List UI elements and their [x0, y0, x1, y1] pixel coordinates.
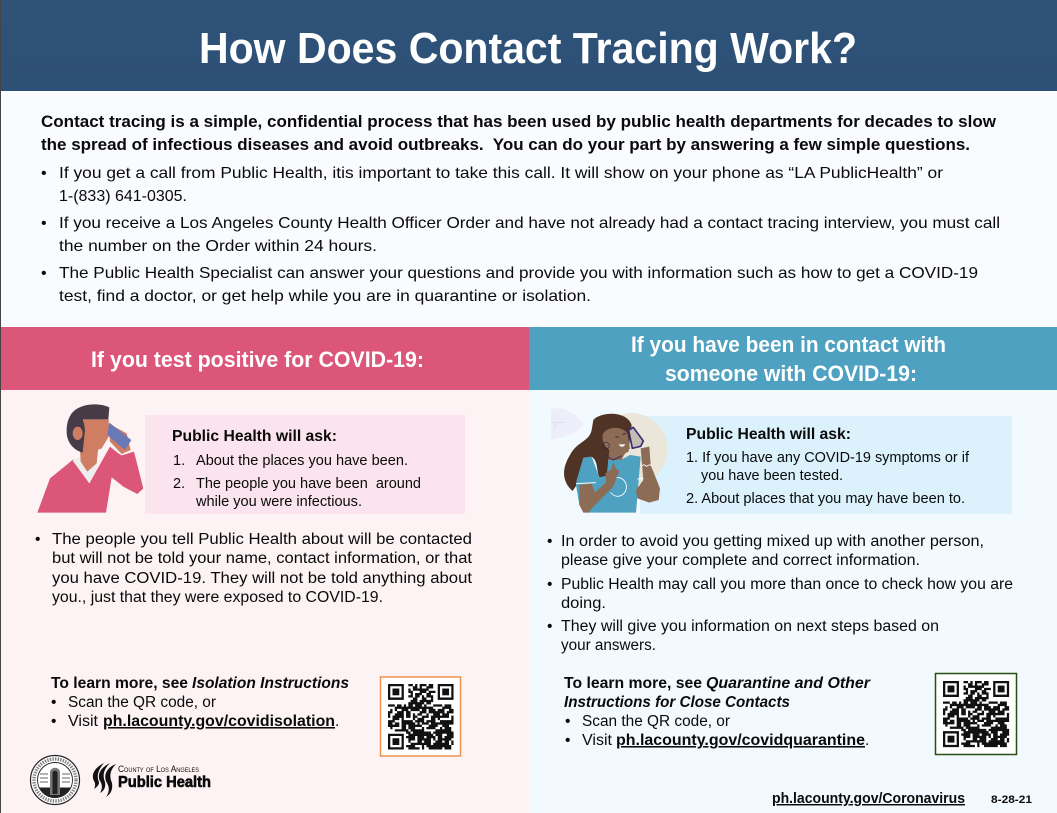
left learn more block: • [51, 694, 56, 711]
intro bullet: take the call: • [41, 165, 47, 182]
left learn more block: ph.lacounty.gov/covidisolation [103, 713, 335, 730]
Public Health logo [93, 763, 211, 797]
right learn more block [564, 675, 871, 749]
left learn more block: Isolation Instructions [192, 675, 349, 692]
left learn more block [51, 675, 349, 730]
left question list: About the places you have been. [196, 453, 408, 469]
right panel bullets: In order to avoid you getting mixed up with another person, [561, 533, 984, 550]
intro bullet: health officer order [41, 215, 1000, 255]
right learn more block: ph.lacounty.gov/covidquarantine [616, 732, 865, 749]
right question list: 2. About places that you may have been to. [686, 491, 965, 507]
left question list: while you were infectious. [195, 494, 362, 510]
left question heading: Public Health will ask: [172, 428, 337, 445]
intro bullet: specialist: The Public Health Specialist can answer your questions and provide you with information such as how to get a COVID-19 [59, 265, 978, 282]
left panel bullets: but will not be told your name, contact information, or that [52, 550, 473, 567]
right panel bullets: • [547, 618, 552, 635]
right panel bullets: your answers. [561, 637, 656, 654]
left panel bullets [35, 531, 473, 606]
intro bold statement [41, 112, 997, 154]
icon: man on phone, pink sweater [37, 404, 143, 513]
left learn more block: Visit [68, 713, 99, 730]
right panel bullets [547, 533, 1013, 654]
intro bullet: take the call: 1-(833) 641-0305. [59, 188, 187, 205]
right panel bullets: • [547, 576, 552, 593]
left learn more block: To learn more, see [51, 675, 188, 692]
intro bold statement: Contact tracing is a simple, confidential process that has been used by public health departments for decades to slow [41, 112, 997, 131]
panel: test positive [0, 327, 529, 813]
intro bullet: health officer order: • [41, 215, 47, 232]
right panel bullets: Public Health may call you more than once to check how you are [561, 576, 1013, 593]
right panel bullets: doing. [561, 595, 606, 612]
icon: woman on phone, blue shirt [551, 408, 668, 513]
right learn more block: Scan the QR code, or [582, 713, 730, 730]
right learn more block: Quarantine and Other [706, 675, 871, 692]
right QR code [936, 674, 1016, 754]
left question list: 1. [173, 453, 185, 469]
intro bullet: specialist [41, 265, 978, 305]
right learn more block: Visit [582, 732, 613, 749]
right panel bullets: • [547, 533, 552, 550]
panel: been in contact [529, 327, 1057, 813]
left learn more block: . [335, 713, 339, 730]
intro bold statement: the spread of infectious diseases and avoid outbreaks. You can do your part by answering a few simple questions. [41, 135, 970, 154]
intro bullet: health officer order: If you receive a Los Angeles County Health Officer Order and have not already had a contact tracing interview, you must call [59, 215, 1000, 232]
county seal [30, 756, 80, 804]
intro bullet: specialist: test, find a doctor, or get help while you are in quarantine or isolation. [59, 288, 591, 305]
left panel bullets: • [35, 531, 40, 548]
right panel bullets: They will give you information on next steps based on [561, 618, 939, 635]
left panel heading: If you test positive for COVID-19: [91, 347, 424, 372]
right panel bullets: please give your complete and correct information. [561, 552, 920, 569]
left QR code [380, 677, 460, 756]
right learn more block: • [565, 713, 570, 730]
right question heading: Public Health will ask: [686, 426, 851, 443]
right learn more block: To learn more, see [564, 675, 702, 692]
Public Health logo: County of Los Angeles [118, 764, 199, 774]
left question list: 2. [173, 476, 185, 492]
intro bullet: health officer order: the number on the Order within 24 hours. [59, 238, 377, 255]
right panel heading: someone with COVID-19: [665, 361, 917, 386]
right question list [686, 450, 970, 507]
left question list: The people you have been around [196, 476, 421, 492]
title: How Does Contact Tracing Work? [199, 24, 857, 73]
intro bullet: take the call [41, 165, 944, 205]
right question box [640, 416, 1012, 514]
intro text block [41, 112, 1000, 305]
right learn more block: Instructions for Close Contacts [564, 694, 790, 711]
right panel heading: If you have been in contact with [631, 332, 946, 357]
left question box [145, 415, 465, 514]
footer date: 8-28-21 [991, 794, 1032, 806]
right question list: you have been tested. [701, 468, 843, 484]
left question list [173, 453, 421, 510]
Public Health logo: Public Health [118, 774, 211, 791]
left panel bullets: you have COVID-19. They will not be told anything about [52, 570, 473, 587]
intro bullet: specialist: • [41, 265, 47, 282]
left panel bullets: you., just that they were exposed to COVID-19. [52, 589, 383, 606]
right question list: 1. If you have any COVID-19 symptoms or if [686, 450, 970, 466]
title banner [0, 0, 1057, 91]
right panel heading [631, 332, 946, 386]
left panel bullets: The people you tell Public Health about will be contacted [52, 531, 472, 548]
right learn more block: • [565, 732, 570, 749]
left learn more block: • [51, 713, 56, 730]
intro bullet: take the call: If you get a call from Public Health, itis important to take this call. It will show on your phone as “LA PublicHealth” or [59, 165, 944, 182]
right learn more block: . [865, 732, 869, 749]
footer website link: ph.lacounty.gov/Coronavirus [772, 791, 965, 807]
left learn more block: Scan the QR code, or [68, 694, 216, 711]
